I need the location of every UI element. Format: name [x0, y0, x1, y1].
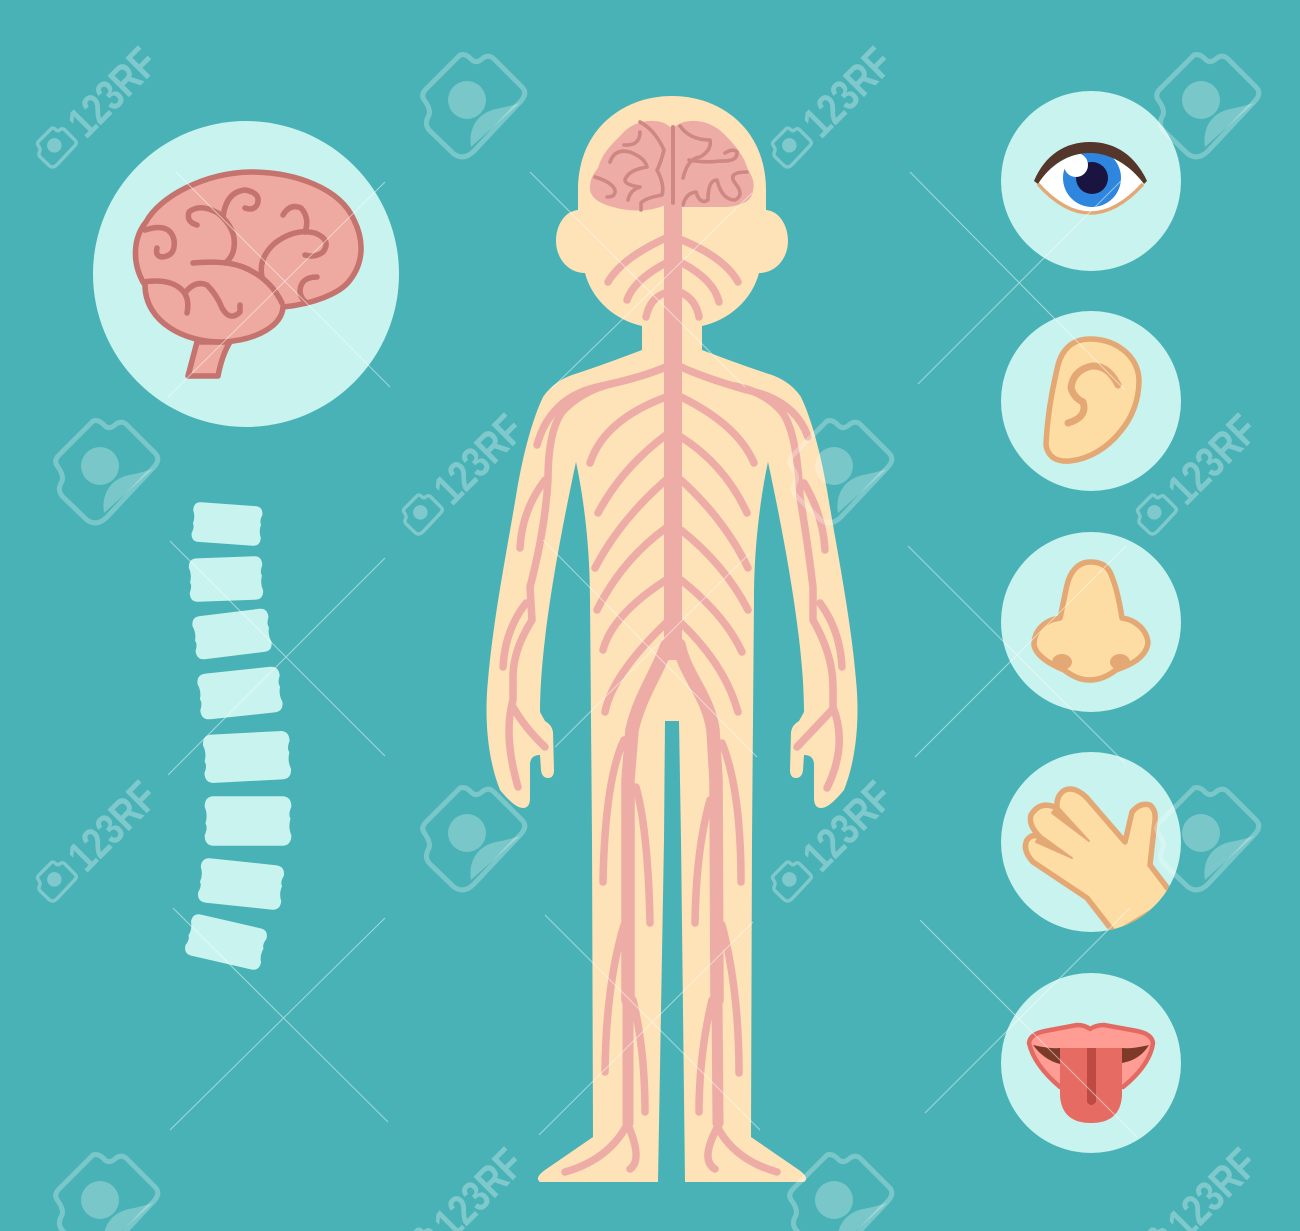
left leg nerves — [628, 645, 667, 1000]
panel: hand — [1001, 752, 1181, 934]
icon: ear — [1046, 339, 1139, 461]
vertebra 5 — [203, 731, 291, 783]
watermark text 3 — [404, 405, 533, 534]
nerve network — [503, 205, 842, 1172]
icon: mouth and tongue — [1029, 1025, 1153, 1123]
panel: nose — [1001, 532, 1181, 712]
trunk nerves left — [590, 397, 666, 463]
logo mark 7 — [56, 1155, 158, 1231]
logo mark 5 — [423, 788, 525, 890]
icon: brain side view — [135, 172, 361, 376]
watermark text 6 — [773, 772, 902, 901]
right leg nerves — [679, 645, 717, 1000]
watermark text 1 — [38, 38, 167, 167]
watermark text 3: 123RF — [424, 405, 533, 514]
vertebra 8 — [184, 914, 268, 970]
vertebra 4 — [197, 667, 283, 719]
logo mark 4 — [790, 421, 892, 523]
icon: nose — [1034, 562, 1148, 680]
eye circle — [1001, 91, 1181, 271]
logo mark 8 — [790, 1155, 892, 1231]
vertebra 6 — [206, 797, 290, 845]
logo mark 6 — [1157, 788, 1259, 890]
watermark text 2 — [773, 38, 902, 167]
tongue circle — [1001, 973, 1181, 1153]
spinal cord — [664, 205, 682, 660]
icon: eye — [1034, 142, 1147, 214]
watermark text 5 — [38, 772, 167, 901]
brain circle — [93, 121, 399, 427]
ear circle — [1001, 311, 1181, 491]
logo mark 2 — [1157, 55, 1259, 157]
watermark text 4: 123RF — [1158, 405, 1267, 514]
body silhouette — [486, 96, 858, 1182]
panel: large brain — [93, 121, 399, 427]
logo mark 3 — [56, 421, 158, 523]
vertebra 2 — [189, 557, 263, 601]
watermark text 8 — [1138, 1139, 1267, 1231]
icon: hand — [1025, 789, 1175, 934]
panel: human body with nervous system — [486, 96, 858, 1182]
icon: brain in head — [590, 121, 754, 211]
vertebra 1 — [192, 502, 262, 546]
watermark text 4 — [1138, 405, 1267, 534]
nose circle — [1001, 532, 1181, 712]
panel: eye — [1001, 91, 1181, 271]
panel: ear — [1001, 311, 1181, 491]
right arm nerves — [681, 367, 808, 437]
logo mark 1 — [423, 55, 525, 157]
watermark text 6: 123RF — [793, 772, 902, 881]
vertebra 3 — [192, 609, 272, 659]
trunk nerves right — [681, 397, 754, 463]
head nerves — [608, 238, 666, 282]
left arm nerves — [537, 367, 666, 445]
watermark hairlines — [168, 172, 1137, 1137]
watermark text 1: 123RF — [58, 38, 167, 147]
spine vertebrae column — [184, 502, 291, 970]
watermark text 7 — [404, 1139, 533, 1231]
hand circle — [1001, 752, 1181, 932]
panel: tongue — [1001, 973, 1181, 1153]
watermark text 2: 123RF — [793, 38, 902, 147]
watermark text 5: 123RF — [58, 772, 167, 881]
vertebra 7 — [198, 858, 284, 910]
